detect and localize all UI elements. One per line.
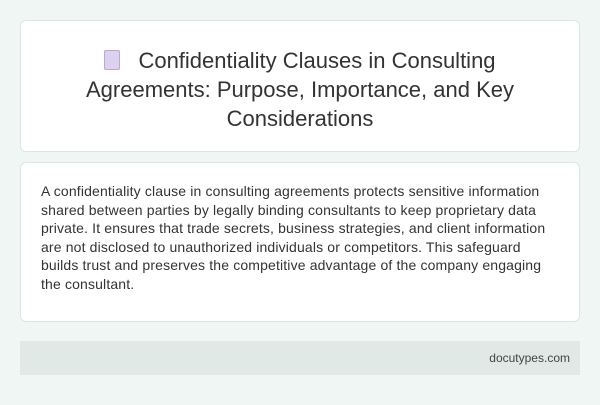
- text block: A confidentiality clause in consulting agreements protects sensitive information shared between parties by legally binding consultants to keep proprietary data private. It ensures that trade secrets, business strategies, and client information are not disclosed to unauthorized individuals or competitors. This safeguard builds trust and preserves the competitive advantage of the company engaging the consultant.: [41, 183, 545, 292]
- icon: document: [104, 50, 120, 70]
- title: Confidentiality Clauses in Consulting Agreements: Purpose, Importance, and Key Considerations: [86, 48, 514, 131]
- source text: docutypes.com: [489, 351, 570, 365]
- panel: description: [20, 162, 580, 322]
- panel: title: [20, 20, 580, 152]
- footer: [20, 341, 580, 375]
